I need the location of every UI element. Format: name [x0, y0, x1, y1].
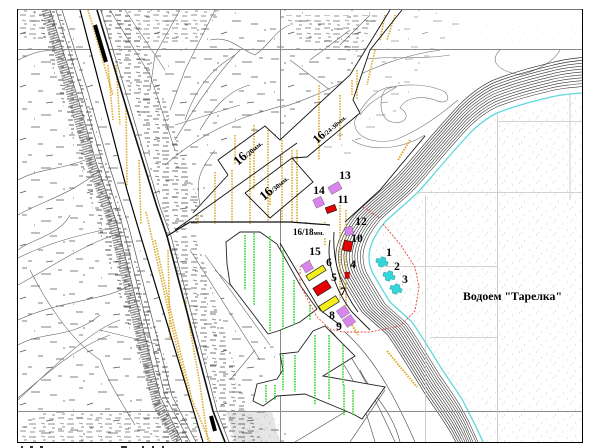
- west contours: [18, 50, 160, 425]
- marker 11: [325, 204, 337, 214]
- well 1: [375, 255, 389, 269]
- terrain texture: north: [320, 10, 470, 165]
- marker numbers: 13: [339, 170, 351, 182]
- marker 6: [306, 265, 326, 281]
- contour extensions to map edge: [462, 420, 478, 442]
- marker numbers: 4: [350, 259, 356, 271]
- marker 5: [313, 280, 331, 296]
- plot 16/30 fill: [280, 166, 281, 209]
- hill contours: [352, 50, 560, 148]
- marker 7: [319, 296, 339, 312]
- plot label 16/20: 16/20мм.: [230, 135, 265, 168]
- shore contours: [336, 56, 596, 448]
- terrain texture: west slope: [18, 10, 203, 442]
- marker numbers: 8: [329, 310, 335, 322]
- marker 13: [328, 182, 342, 194]
- well 3: [389, 282, 403, 296]
- marker numbers: [309, 170, 408, 333]
- marker numbers: 2: [394, 261, 400, 273]
- marker numbers: 15: [309, 246, 321, 258]
- marker numbers: 14: [313, 185, 325, 197]
- dense top marks: [18, 10, 380, 55]
- coastline: [369, 93, 582, 442]
- white plots: [182, 49, 370, 224]
- marker 4: [345, 272, 350, 278]
- plot label 16/24-30: 16/24-30мм.: [310, 110, 349, 146]
- marker numbers: 12: [355, 216, 367, 228]
- marker 9: [342, 314, 356, 328]
- railway hatch band: [46, 10, 178, 442]
- yellow stripes in corridor: [88, 10, 417, 442]
- marker numbers: 1: [386, 247, 392, 259]
- marker numbers: 9: [336, 321, 342, 333]
- green zones: [226, 232, 385, 419]
- parallel rail lines: [50, 10, 196, 442]
- marker 10: [343, 240, 353, 252]
- marker numbers: 11: [338, 194, 349, 206]
- well markers: [375, 255, 403, 296]
- marker numbers: 6: [326, 257, 332, 269]
- plot outlines and access road: [167, 10, 425, 330]
- marker 8: [336, 305, 350, 319]
- cropped caption fragments: [21, 446, 164, 448]
- marker numbers: 3: [402, 274, 408, 286]
- protected area boundary: [300, 207, 419, 332]
- east slope contours: [110, 10, 440, 380]
- water stipple: [370, 95, 582, 442]
- water body label: Водоем "Тарелка": [463, 291, 562, 303]
- dense road-side marks: [100, 10, 205, 235]
- dense settlement corner: [20, 412, 205, 442]
- marker 14: [313, 196, 325, 208]
- marker numbers: 10: [351, 233, 363, 245]
- plot label 16/18: 16/18мм.: [293, 227, 324, 237]
- marker numbers: 7: [340, 286, 346, 298]
- well 2: [382, 269, 396, 283]
- lower contour fan: [295, 330, 415, 442]
- facility markers: [301, 182, 356, 328]
- terrain texture: east of road: [100, 10, 390, 442]
- marker 15: [301, 261, 314, 273]
- road bars: [95, 25, 215, 431]
- road corridor fill: [90, 49, 212, 442]
- marker numbers: 5: [331, 272, 337, 284]
- marker 12: [344, 226, 354, 236]
- plot label 16/30: 16/30мм.: [256, 170, 291, 203]
- road lines: [80, 10, 203, 442]
